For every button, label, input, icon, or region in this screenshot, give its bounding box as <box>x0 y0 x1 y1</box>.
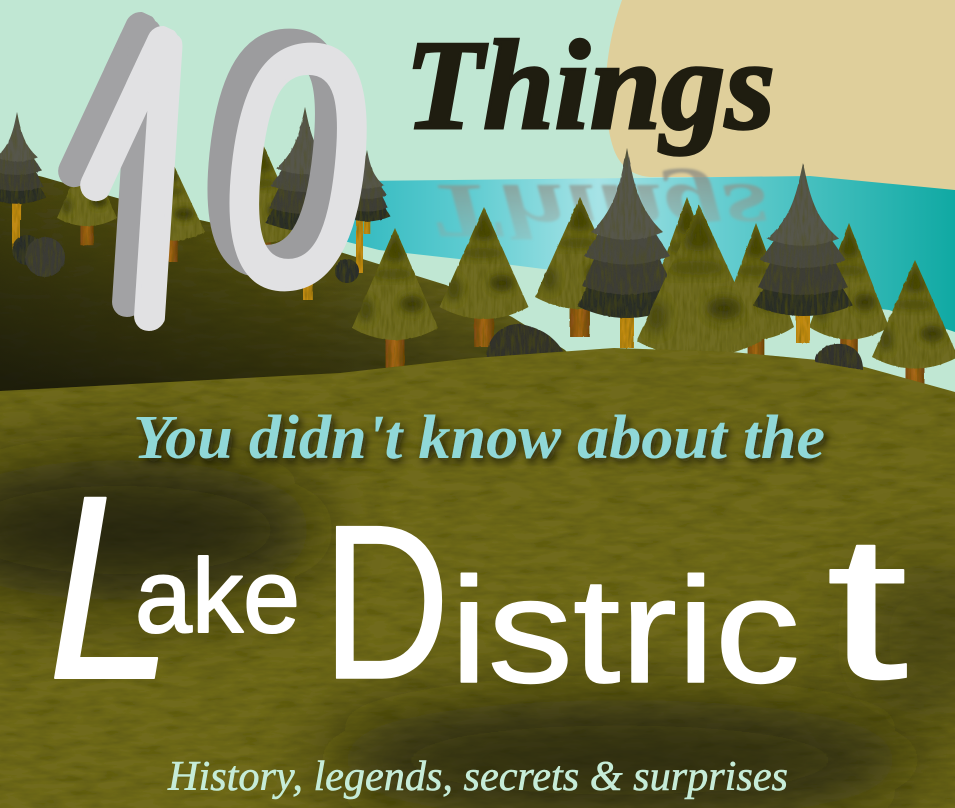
title Lake: ake <box>135 538 300 655</box>
bush right <box>815 344 863 370</box>
tree: fir inside zero <box>265 107 345 300</box>
boulder by zero <box>335 259 359 283</box>
grass <box>0 348 955 808</box>
left hill <box>0 166 610 396</box>
heading Things: Things <box>405 14 775 156</box>
tree: fir far left <box>0 112 46 250</box>
hill shadow <box>0 166 610 396</box>
tree: conifer middle <box>135 157 205 262</box>
tree: fir right <box>753 163 853 343</box>
tree: fir right of ten <box>344 150 390 273</box>
tree: conifer behind right fir <box>809 223 889 369</box>
title District: t <box>826 493 908 722</box>
title District: D <box>322 479 450 725</box>
number 10 3D <box>58 12 367 331</box>
tree: conifer by hill <box>352 228 438 368</box>
subheading: You didn't know about the <box>133 404 825 472</box>
tree: conifer behind large <box>647 197 727 351</box>
tree: large conifer <box>636 205 762 395</box>
tree: fir centre <box>577 148 677 348</box>
tree: conifer left <box>57 150 117 245</box>
tree: conifer far right <box>872 260 955 396</box>
trees <box>0 107 955 396</box>
title District: istric <box>450 546 800 714</box>
reflection of Things in the lake: Things <box>428 168 770 255</box>
tree: conifer behind fir <box>535 197 625 337</box>
shadow patch left <box>0 460 320 600</box>
tree: conifer behind ten <box>222 142 302 268</box>
hill shape <box>0 166 610 396</box>
sun <box>606 0 955 191</box>
tree: conifer centre <box>440 207 528 347</box>
boulder left <box>25 237 65 277</box>
shadow patch lower right <box>320 700 920 808</box>
lake <box>340 176 955 332</box>
shadow patch right <box>860 560 955 720</box>
bush centre <box>487 324 567 358</box>
title Lake: L <box>48 441 173 734</box>
boulder small left <box>12 235 42 265</box>
tree: conifer right of large <box>718 223 794 369</box>
tagline: History, legends, secrets & surprises <box>167 754 788 800</box>
foreground hill <box>0 348 955 808</box>
